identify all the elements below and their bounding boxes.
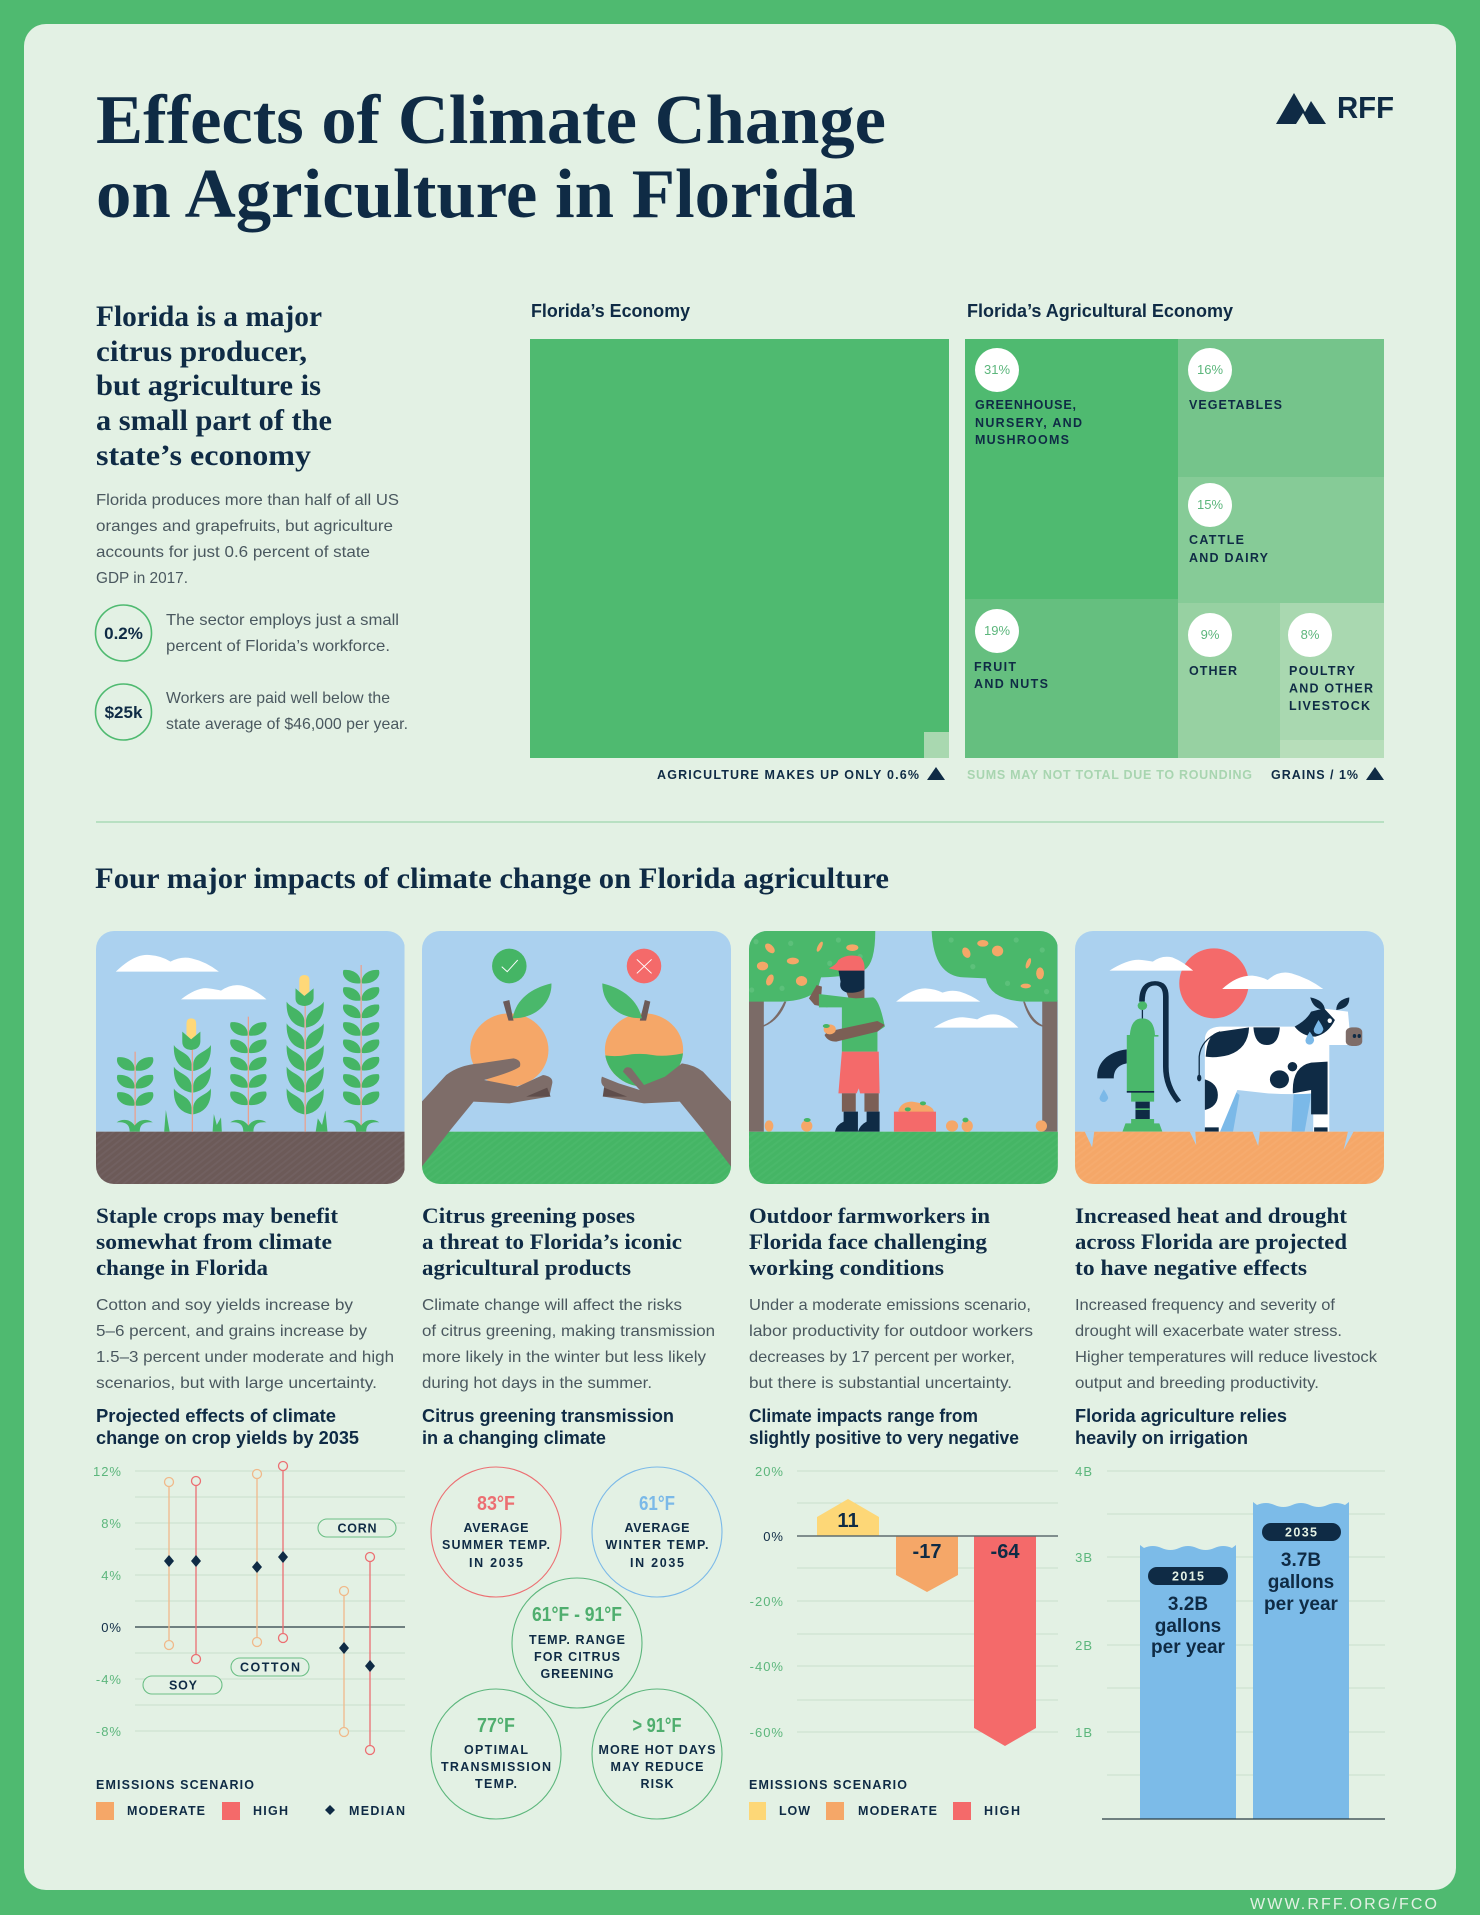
title: on Agriculture in Florida — [96, 156, 856, 233]
circle: winter temp — [592, 1467, 722, 1597]
intro body text: accounts for just 0.6 percent of state — [96, 544, 370, 561]
chart: labor productivity — [749, 1464, 1058, 1820]
circle: hot days: MORE HOT DAYS — [598, 1743, 716, 1757]
chart: irrigation — [1075, 1464, 1385, 1819]
logo: RFF — [1276, 90, 1394, 125]
y axis labels: 20% — [755, 1464, 784, 1479]
stat: workforce share: percent of Florida’s workforce. — [166, 638, 390, 655]
body text: decreases by 17 percent per worker, — [749, 1349, 1015, 1366]
body text — [749, 1297, 1033, 1392]
stat: workforce share: 0.2% — [104, 624, 143, 643]
heading: working conditions — [749, 1255, 944, 1280]
agriculture note: AGRICULTURE MAKES UP ONLY 0.6% — [657, 768, 919, 782]
label: soy: SOY — [169, 1678, 198, 1692]
body text: Climate change will affect the risks — [422, 1297, 682, 1314]
heading: somewhat from climate — [96, 1229, 332, 1254]
circle: hot days: RISK — [640, 1777, 674, 1791]
tile: grains — [1280, 740, 1384, 758]
illustration: staple crops — [96, 931, 405, 1185]
bar: 2015: 2015 — [1172, 1570, 1204, 1584]
chart heading: slightly positive to very negative — [749, 1428, 1019, 1448]
tile: cattle and dairy: 15% — [1197, 497, 1223, 512]
body text: but there is substantial uncertainty. — [749, 1375, 1012, 1392]
intro body text: GDP in 2017. — [96, 570, 188, 587]
circle: hot days: MAY REDUCE — [610, 1760, 704, 1774]
heading — [96, 1203, 339, 1280]
circle: optimal temp — [431, 1689, 561, 1819]
heading: Outdoor farmworkers in — [749, 1203, 990, 1228]
body text: drought will exacerbate water stress. — [1075, 1323, 1342, 1340]
circle: optimal temp: 77°F — [477, 1715, 515, 1737]
bar: 2035: per year — [1264, 1594, 1339, 1615]
y axis labels — [93, 1464, 122, 1739]
legend: MODERATE — [127, 1804, 205, 1818]
bar: high — [974, 1536, 1036, 1746]
heading — [1075, 1203, 1348, 1280]
cotton ranges — [252, 1462, 288, 1646]
circle: summer temp: 83°F — [477, 1493, 515, 1515]
stat: worker pay: $25k — [105, 703, 143, 722]
title: Effects of Climate Change — [96, 82, 886, 159]
body text: of citrus greening, making transmission — [422, 1323, 715, 1340]
body text: scenarios, but with large uncertainty. — [96, 1375, 377, 1392]
tile: fruit and nuts: 19% — [984, 623, 1010, 638]
y axis labels: 4B — [1075, 1464, 1093, 1479]
y axis labels — [750, 1464, 784, 1740]
column: farmworkers — [749, 1203, 1033, 1448]
body text: Higher temperatures will reduce livestock — [1075, 1349, 1378, 1366]
heading: Florida face challenging — [749, 1229, 987, 1254]
tile: poultry: LIVESTOCK — [1289, 699, 1370, 713]
legend — [96, 1778, 405, 1820]
tile: greenhouse — [965, 339, 1178, 599]
bar: 2015 — [1140, 1545, 1236, 1819]
y axis labels: -40% — [750, 1659, 784, 1674]
heading: major citrus producer: citrus producer, — [96, 335, 307, 368]
circle: optimal temp: OPTIMAL — [464, 1743, 528, 1757]
heading: change in Florida — [96, 1255, 268, 1280]
tile: poultry: 8% — [1301, 627, 1320, 642]
tile: greenhouse: GREENHOUSE, — [975, 398, 1076, 412]
circle: winter temp: AVERAGE — [624, 1521, 690, 1535]
treemap: Florida's agricultural economy: Florida’s Agricultural Economy — [967, 301, 1233, 321]
tile: fruit and nuts: FRUIT — [974, 660, 1016, 674]
bar: 2035: 2035 — [1285, 1526, 1317, 1540]
circle: greening range: GREENING — [540, 1667, 614, 1681]
circle: hot days: > 91°F — [632, 1715, 682, 1737]
y axis labels: 3B — [1075, 1550, 1093, 1565]
grains note: GRAINS / 1% — [1271, 768, 1358, 782]
body text: 1.5–3 percent under moderate and high — [96, 1349, 394, 1366]
body text — [1075, 1297, 1378, 1392]
intro body text: oranges and grapefruits, but agriculture — [96, 518, 393, 535]
bar: 2015: gallons — [1155, 1616, 1221, 1637]
heading: major citrus producer: but agriculture is — [96, 369, 321, 402]
tile: greenhouse: NURSERY, AND — [975, 416, 1082, 430]
stat: workforce share — [96, 605, 399, 661]
chart heading: Projected effects of climate — [96, 1406, 336, 1426]
heading — [749, 1203, 990, 1280]
bar: high: -64 — [991, 1541, 1020, 1563]
y axis labels: 4% — [101, 1568, 122, 1583]
bar: low — [817, 1499, 879, 1536]
circle: winter temp: 61°F — [639, 1493, 675, 1515]
column: citrus greening — [422, 1203, 715, 1448]
stat: worker pay — [96, 684, 408, 740]
y axis labels: -8% — [96, 1724, 122, 1739]
body text — [96, 1297, 394, 1392]
tile: greenhouse: 31% — [984, 362, 1010, 377]
label: corn — [318, 1519, 396, 1537]
body text: labor productivity for outdoor workers — [749, 1323, 1033, 1340]
bar: low: 11 — [837, 1510, 859, 1532]
bar: moderate: -17 — [913, 1541, 941, 1563]
body text: Increased frequency and severity of — [1075, 1297, 1336, 1314]
body text: Cotton and soy yields increase by — [96, 1297, 353, 1314]
body text: Under a moderate emissions scenario, — [749, 1297, 1031, 1314]
heading: Staple crops may benefit — [96, 1203, 339, 1228]
heading: major citrus producer — [96, 300, 332, 472]
treemap: Florida's agricultural economy — [965, 301, 1384, 782]
treemap: Florida's economy — [530, 301, 949, 782]
bar: 2035 — [1253, 1502, 1349, 1819]
body text: more likely in the winter but less likely — [422, 1349, 706, 1366]
tile: vegetables: VEGETABLES — [1189, 398, 1282, 412]
y axis labels: 0% — [101, 1620, 122, 1635]
legend: EMISSIONS SCENARIO — [96, 1778, 254, 1792]
bar: 2015: per year — [1151, 1637, 1226, 1658]
chart: temperature circles — [431, 1467, 722, 1819]
bar: moderate — [896, 1536, 958, 1592]
stat: workforce share: The sector employs just a small — [166, 612, 399, 629]
legend: MEDIAN — [349, 1804, 405, 1818]
chart heading: in a changing climate — [422, 1428, 606, 1448]
y axis labels: 12% — [93, 1464, 122, 1479]
label: soy — [143, 1676, 222, 1694]
tile: vegetables: 16% — [1197, 362, 1223, 377]
heading: to have negative effects — [1075, 1255, 1307, 1280]
chart heading: heavily on irrigation — [1075, 1428, 1248, 1448]
body text: 5–6 percent, and grains increase by — [96, 1323, 367, 1340]
tile: greenhouse: MUSHROOMS — [975, 433, 1069, 447]
heading — [422, 1203, 682, 1280]
circle: summer temp: AVERAGE — [464, 1521, 528, 1535]
tile: other: 9% — [1201, 627, 1220, 642]
circle: winter temp: IN 2035 — [630, 1556, 684, 1570]
tile: poultry: POULTRY — [1289, 664, 1356, 678]
agriculture share square — [924, 732, 949, 758]
y axis labels: -4% — [96, 1672, 122, 1687]
logo: RFF: RFF — [1337, 90, 1394, 125]
heading: across Florida are projected — [1075, 1229, 1347, 1254]
chart heading — [422, 1406, 674, 1448]
panel: intro text — [96, 300, 408, 740]
illustration: farmworker — [748, 931, 1058, 1185]
legend: EMISSIONS SCENARIO — [749, 1778, 907, 1792]
y axis labels — [1075, 1464, 1093, 1740]
label: corn: CORN — [338, 1522, 376, 1536]
title — [96, 82, 886, 233]
column: heat and drought — [1075, 1203, 1378, 1448]
circle: summer temp: IN 2035 — [469, 1556, 523, 1570]
bar: 2035: gallons — [1268, 1572, 1334, 1593]
chart heading — [96, 1406, 359, 1448]
tile: other — [1178, 603, 1280, 758]
heading: major citrus producer: Florida is a major — [96, 300, 322, 333]
corn ranges — [339, 1552, 375, 1754]
y axis labels: 1B — [1075, 1725, 1093, 1740]
circle: greening range — [512, 1578, 642, 1708]
intro body text — [96, 492, 399, 587]
circle: greening range: TEMP. RANGE — [529, 1633, 625, 1647]
tile: other: OTHER — [1189, 664, 1237, 678]
intro body text: Florida produces more than half of all US — [96, 492, 399, 509]
chart heading: Citrus greening transmission — [422, 1406, 674, 1426]
tile: poultry: AND OTHER — [1289, 682, 1373, 696]
bar: 2015: 3.2B — [1168, 1594, 1208, 1615]
legend — [749, 1778, 1020, 1820]
heading: Citrus greening poses — [422, 1203, 635, 1228]
bar: 2035: 3.7B — [1281, 1550, 1321, 1571]
tile: fruit and nuts: AND NUTS — [974, 677, 1048, 691]
circle: hot days — [592, 1689, 722, 1819]
body text — [422, 1297, 715, 1392]
circle: summer temp: SUMMER TEMP. — [442, 1538, 550, 1552]
circle: optimal temp: TRANSMISSION — [441, 1760, 551, 1774]
circle: summer temp — [431, 1467, 561, 1597]
heading: a threat to Florida’s iconic — [422, 1229, 682, 1254]
stat: worker pay: Workers are paid well below the — [166, 690, 390, 707]
tile: cattle and dairy: AND DAIRY — [1189, 551, 1269, 565]
footer url: WWW.RFF.ORG/FCO — [1250, 1896, 1437, 1913]
circle: winter temp: WINTER TEMP. — [606, 1538, 708, 1552]
body text: output and breeding productivity. — [1075, 1375, 1319, 1392]
illustration: citrus in hands — [422, 931, 732, 1185]
rounding note: SUMS MAY NOT TOTAL DUE TO ROUNDING — [967, 768, 1252, 782]
y axis labels: 8% — [101, 1516, 122, 1531]
legend: MODERATE — [858, 1804, 937, 1818]
treemap: Florida's economy: Florida’s Economy — [531, 301, 690, 321]
column: staple crops — [96, 1203, 394, 1448]
tile: fruit and nuts — [965, 599, 1178, 758]
chart heading — [1075, 1406, 1287, 1448]
chart heading — [749, 1406, 1019, 1448]
chart heading: Climate impacts range from — [749, 1406, 978, 1426]
y axis labels: 0% — [763, 1529, 784, 1544]
soy ranges — [164, 1476, 201, 1664]
chart heading: change on crop yields by 2035 — [96, 1428, 359, 1448]
legend: HIGH — [253, 1804, 288, 1818]
heading: major citrus producer: a small part of the — [96, 404, 332, 437]
label: cotton — [231, 1658, 309, 1676]
section heading: Four major impacts of climate change on Florida agriculture — [95, 862, 889, 895]
y axis labels: -60% — [750, 1725, 784, 1740]
label: cotton: COTTON — [240, 1660, 300, 1674]
circle: optimal temp: TEMP. — [475, 1777, 517, 1791]
stat: worker pay: state average of $46,000 per year. — [166, 716, 408, 733]
y axis labels: -20% — [750, 1594, 784, 1609]
legend: HIGH — [984, 1804, 1020, 1818]
tile: vegetables — [1178, 339, 1384, 477]
illustration: pump and cow — [1075, 931, 1384, 1185]
body text: during hot days in the summer. — [422, 1375, 652, 1392]
heading: agricultural products — [422, 1255, 631, 1280]
circle: greening range: 61°F - 91°F — [532, 1604, 622, 1626]
chart heading: Florida agriculture relies — [1075, 1406, 1287, 1426]
legend: LOW — [779, 1804, 810, 1818]
heading: major citrus producer: state’s economy — [96, 439, 311, 472]
heading: Increased heat and drought — [1075, 1203, 1348, 1228]
tile: poultry — [1280, 603, 1384, 740]
chart: crop yields range — [93, 1462, 405, 1820]
circle: greening range: FOR CITRUS — [534, 1650, 620, 1664]
y axis labels: 2B — [1075, 1638, 1093, 1653]
tile: cattle and dairy — [1178, 477, 1384, 603]
tile: cattle and dairy: CATTLE — [1189, 533, 1244, 547]
